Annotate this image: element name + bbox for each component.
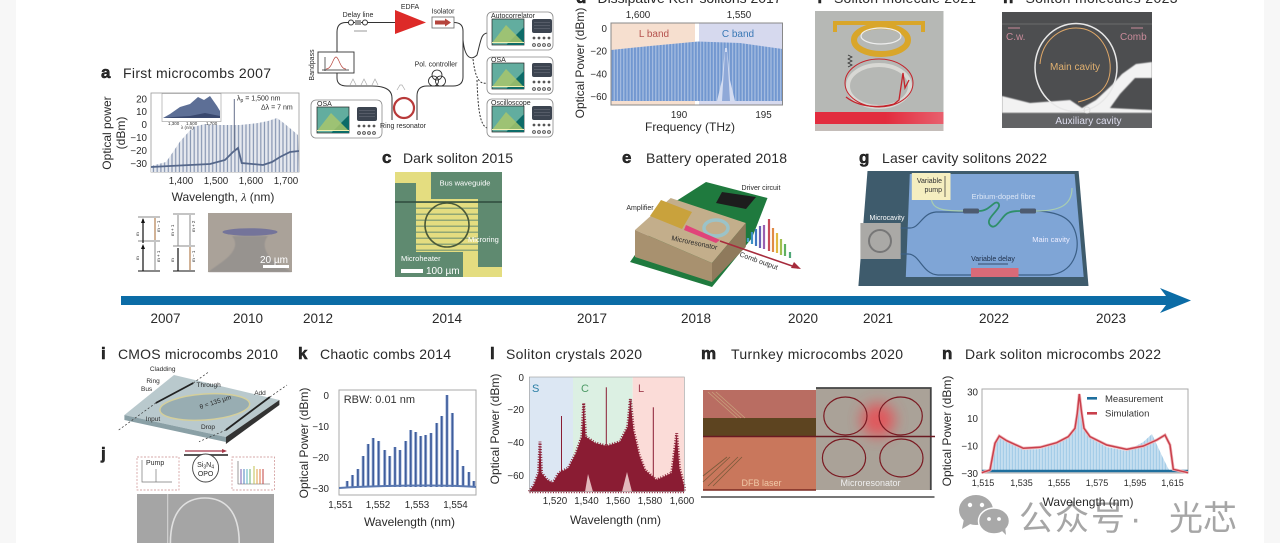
y ticks: −20 [130, 146, 148, 157]
y ticks: 10 [136, 107, 148, 118]
panel f: soliton molecule [815, 0, 976, 131]
panel k: chaotic combs [297, 344, 476, 529]
microtoroid photo [208, 213, 292, 272]
panel d: dissipative Kerr solitons [573, 0, 782, 134]
y ticks: 30 [967, 388, 979, 398]
bandpass filter: Bandpass [309, 49, 316, 81]
timeline years: 2007 [150, 311, 181, 326]
chip diagram: θ = 135 µm [199, 394, 232, 411]
y ticks: 0 [142, 120, 148, 131]
y ticks [961, 388, 979, 480]
micrograph: Main cavity [1050, 62, 1100, 73]
y ticks [130, 94, 148, 170]
y ticks: 0 [519, 373, 525, 384]
pulses [350, 79, 405, 90]
energy level diagram: m + 1 [170, 224, 175, 236]
inset spectrum: λ (nm) [181, 125, 194, 130]
energy level diagram: m + 1 [156, 250, 161, 262]
x ticks: 1,520 [543, 496, 568, 507]
timeline years: 2018 [681, 311, 711, 326]
panel letter e: e [622, 148, 631, 167]
fibre cavity diagram: Variable delay [971, 256, 1015, 263]
x ticks [328, 500, 468, 511]
autocorrelator instrument: Autocorrelator [491, 13, 536, 20]
y ticks: −10 [961, 442, 979, 452]
y axis label: Optical Power (dBm) [573, 8, 587, 118]
chip diagram: Ring [146, 378, 160, 385]
y ticks: −20 [507, 405, 525, 416]
energy level diagram: m + 2 [191, 220, 196, 232]
x ticks [543, 496, 695, 507]
micrograph: C.w. [1006, 32, 1025, 43]
x ticks: 1,615 [1161, 478, 1184, 488]
top ticks [626, 10, 752, 21]
EDFA amplifier: EDFA [401, 4, 419, 11]
x ticks: 1,540 [574, 496, 599, 507]
icon: wechat bubbles [959, 495, 1010, 535]
microtoroid photo: 20 µm [260, 255, 288, 266]
timeline years: 2017 [577, 311, 607, 326]
timeline years: 2012 [303, 311, 333, 326]
x ticks: 1,515 [972, 478, 994, 488]
battery device [626, 182, 801, 287]
timeline years: 2010 [233, 311, 263, 326]
chip diagram: Drop [201, 424, 215, 431]
comb chart [611, 23, 782, 105]
OSA instrument 2 [487, 57, 553, 94]
oscilloscope instrument [487, 99, 553, 137]
x ticks: 1,600 [670, 496, 695, 507]
OPO schematic: Si [197, 462, 203, 469]
watermark name: 光芯 [1169, 500, 1237, 538]
x ticks: 1,560 [606, 496, 631, 507]
panel n x axis label: Wavelength (nm) [1043, 495, 1133, 509]
microheater photo: Microheater [401, 254, 441, 263]
y ticks: −40 [590, 70, 608, 80]
bottom ticks: 195 [755, 110, 772, 121]
watermark [959, 495, 1237, 538]
OPO schematic: OPO [198, 471, 214, 478]
chip diagram [119, 366, 287, 444]
chip photo [701, 388, 935, 498]
title l: Soliton crystals 2020 [506, 346, 642, 362]
title n: Dark soliton microcombs 2022 [965, 346, 1161, 362]
x axis label: Wavelength, λ (nm) [172, 190, 274, 204]
y ticks [590, 24, 608, 103]
energy level diagram: m [135, 256, 140, 260]
y ticks: −10 [312, 422, 330, 433]
energy level diagram: m [170, 258, 175, 262]
inset spectrum: 1,300 [168, 121, 180, 126]
energy level diagram: m − 1 [156, 220, 161, 232]
y axis label: Optical power [100, 96, 114, 170]
timeline years: 2023 [1096, 311, 1126, 326]
spectrum chart: L [638, 383, 644, 395]
EDFA amplifier [395, 4, 426, 34]
timeline arrow [121, 288, 1191, 313]
battery device: Amplifier [626, 205, 654, 212]
y ticks: 20 [136, 94, 148, 106]
y ticks: 10 [967, 414, 979, 425]
x axis label: Wavelength (nm) [570, 513, 661, 527]
panel e: battery operated [622, 148, 801, 287]
y ticks: −30 [312, 484, 330, 495]
title m: Turnkey microcombs 2020 [731, 346, 903, 362]
OPO schematic [137, 449, 274, 490]
top ticks: 1,600 [626, 10, 651, 21]
watermark separator: · [1130, 500, 1141, 538]
chip photo: DFB laser [741, 478, 782, 488]
bottom ticks [671, 110, 772, 121]
chip diagram: Add [254, 390, 266, 397]
fibre cavity diagram: Variable [917, 178, 942, 185]
y ticks: −40 [507, 438, 525, 449]
y axis unit: (dBm) [114, 117, 128, 149]
chip diagram: Cladding [150, 366, 176, 373]
fibre cavity diagram: Microcavity [869, 215, 905, 222]
fibre cavity diagram: Main cavity [1032, 235, 1070, 244]
energy level diagram [135, 214, 196, 271]
spectrum chart [982, 389, 1188, 473]
delay line [343, 12, 373, 31]
x ticks: 1,552 [366, 500, 390, 511]
comb chart [339, 390, 476, 495]
chip render [815, 11, 944, 131]
battery device: Microresonator [671, 235, 719, 252]
coupler lines to instruments [463, 33, 487, 128]
microheater photo: Bus waveguide [440, 178, 490, 188]
panel letter l: l [490, 344, 495, 363]
bottom ticks: 190 [671, 110, 688, 121]
timeline years: 2014 [432, 311, 463, 326]
inset spectrum: 1,700 [206, 121, 218, 126]
fibre cavity diagram: Erbium-doped fibre [972, 192, 1035, 201]
panel b: laser loop schematic [309, 4, 553, 138]
fibre loop [337, 22, 463, 120]
x ticks [972, 478, 1184, 488]
annotation pump wavelength: = 1,500 nm [243, 96, 281, 102]
y ticks [507, 373, 525, 482]
oscilloscope instrument: Oscilloscope [491, 100, 531, 107]
comb chart: L band [639, 29, 669, 40]
OSA instrument [311, 100, 382, 138]
panel a: first microcombs [100, 63, 299, 272]
title k: Chaotic combs 2014 [320, 346, 451, 362]
OPO schematic: N [206, 462, 211, 469]
x ticks: 1,600 [239, 176, 264, 187]
OPO schematic: 3 [203, 464, 206, 470]
panel letter m: m [701, 344, 716, 363]
microheater photo: Microring [468, 235, 499, 244]
panel letter i: i [101, 344, 106, 363]
x axis label: Frequency (THz) [645, 120, 735, 134]
y ticks: 0 [324, 391, 330, 402]
inset spectrum: 1,500 [186, 121, 198, 126]
ring micrograph [137, 494, 274, 543]
y axis label: Optical Power (dBm) [488, 374, 502, 484]
title a: First microcombs 2007 [123, 65, 271, 81]
panel j: OPO [100, 444, 274, 543]
x axis label: Wavelength (nm) [364, 515, 455, 529]
y ticks: −10 [130, 133, 148, 144]
panel l: soliton crystals [488, 344, 695, 527]
timeline years: 2021 [863, 311, 893, 326]
spectrum chart: Simulation [1105, 408, 1149, 420]
panel letter j: j [100, 444, 106, 463]
top ticks: 1,550 [727, 10, 752, 21]
y ticks: −30 [130, 159, 148, 170]
annotation spacing: Δλ = 7 nm [261, 104, 293, 112]
micrograph: Comb [1120, 32, 1147, 43]
x ticks: 1,595 [1124, 478, 1146, 488]
energy level diagram: m [135, 232, 140, 236]
x ticks [169, 176, 299, 187]
title c: Dark soliton 2015 [403, 150, 513, 166]
fibre cavity diagram: pump [924, 187, 942, 194]
y ticks: −20 [590, 46, 608, 58]
microheater photo: 100 µm [426, 266, 460, 277]
isolator: Isolator [432, 8, 455, 16]
panel m: turnkey microcombs [701, 344, 935, 498]
y axis label: Optical Power (dBm) [940, 376, 954, 486]
spectrum chart [151, 93, 299, 172]
x ticks: 1,575 [1086, 478, 1108, 488]
y ticks: −20 [312, 453, 330, 464]
panel letter a: a [101, 63, 111, 82]
chip photo: Microresonator [840, 478, 901, 488]
y ticks [312, 391, 330, 495]
spectrum chart: S [532, 383, 539, 395]
spectrum chart: C [581, 383, 589, 395]
y ticks: −60 [590, 92, 608, 103]
chip diagram: Bus [141, 386, 153, 393]
annotation pump wavelength: λ [237, 96, 240, 102]
battery device: Comb output [738, 251, 779, 272]
micrograph [1002, 12, 1152, 128]
battery device: Driver circuit [742, 185, 780, 192]
title g: Laser cavity solitons 2022 [882, 150, 1047, 166]
x ticks: 1,700 [274, 176, 299, 187]
panel letter n: n [942, 344, 952, 363]
OPO schematic: 4 [211, 464, 214, 470]
x ticks: 1,551 [328, 500, 353, 511]
title i: CMOS microcombs 2010 [118, 346, 278, 362]
y ticks: 0 [602, 24, 608, 35]
bandpass filter [309, 49, 354, 81]
panel n: dark soliton microcombs [940, 344, 1188, 488]
watermark text: 公众号 [1019, 500, 1127, 538]
panel i: CMOS microcombs [101, 344, 287, 444]
microheater photo [395, 172, 502, 277]
autocorrelator instrument [487, 12, 553, 50]
panel letter k: k [298, 344, 308, 363]
y axis label: Optical Power (dBm) [297, 388, 311, 498]
chip diagram: Input [146, 416, 160, 423]
x ticks: 1,553 [405, 500, 430, 511]
isolator [432, 8, 455, 28]
x ticks: 1,400 [169, 176, 194, 187]
panel h: soliton molecules [1002, 0, 1178, 128]
polarisation controller: Pol. controller [415, 62, 458, 68]
x ticks: 1,555 [1048, 478, 1070, 488]
OSA instrument: OSA [317, 101, 332, 108]
polarisation controller [415, 62, 458, 86]
y ticks: −60 [507, 471, 525, 482]
chip diagram: Through [196, 382, 221, 389]
title e: Battery operated 2018 [646, 150, 787, 166]
fibre cavity diagram [858, 171, 1088, 286]
x ticks: 1,580 [638, 496, 663, 507]
x ticks: 1,535 [1010, 478, 1033, 488]
comb chart: C band [722, 29, 754, 40]
OPO schematic: Pump [146, 460, 164, 467]
panel letter g: g [859, 148, 869, 167]
x ticks: 1,500 [204, 176, 229, 187]
spectrum chart: Measurement [1105, 394, 1163, 405]
energy level diagram: m − 1 [191, 250, 196, 262]
annotation pump wavelength: p [240, 98, 244, 104]
inset spectrum [162, 94, 221, 130]
OSA instrument 2: OSA [491, 57, 506, 64]
timeline years [150, 311, 1126, 326]
x ticks: 1,554 [443, 500, 468, 511]
delay line: Delay line [343, 12, 373, 19]
panel letter c: c [382, 148, 391, 167]
ring resonator [380, 98, 427, 130]
spectrum chart [529, 377, 684, 492]
comb chart: RBW: 0.01 nm [344, 394, 415, 406]
panel c: dark soliton [382, 148, 513, 277]
micrograph: Auxiliary cavity [1055, 116, 1122, 127]
timeline years: 2022 [979, 311, 1009, 326]
timeline years: 2020 [788, 311, 818, 326]
panel g: laser cavity solitons [858, 148, 1088, 286]
ring resonator: Ring resonator [380, 123, 427, 130]
y ticks: −30 [961, 469, 979, 480]
